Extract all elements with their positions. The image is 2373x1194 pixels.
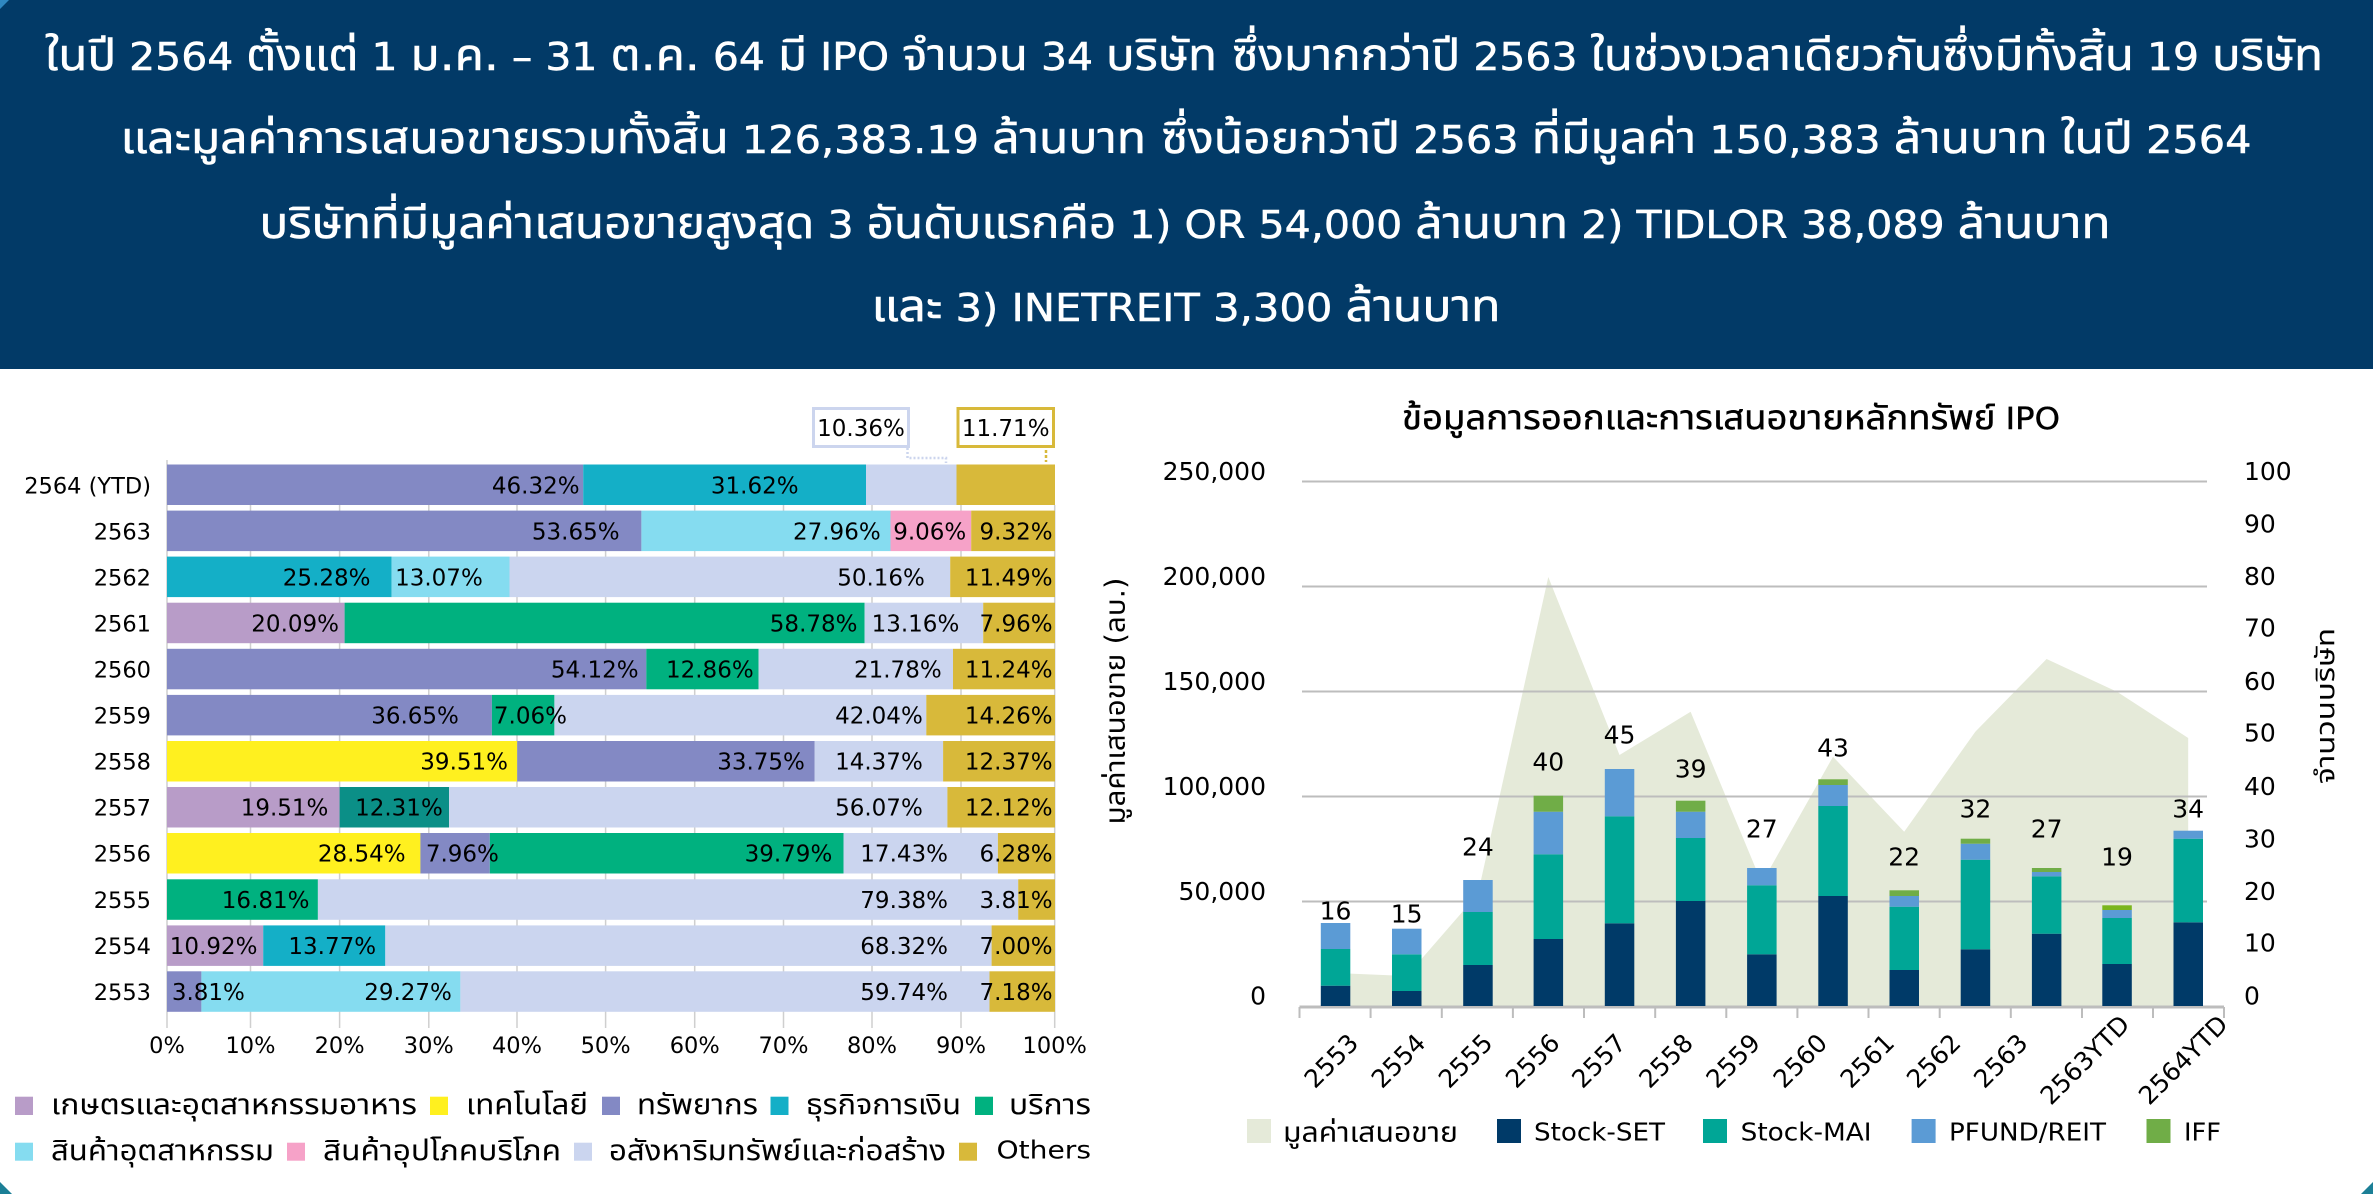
- left axis title: มูลค่าเสนอขาย (ลบ.): [1098, 577, 1132, 825]
- legend: series: มูลค่าเสนอขาย: [1283, 1116, 1458, 1150]
- bar: 2555: 3.81%: [980, 888, 1053, 914]
- bar: 2554: 13.77%: [288, 934, 376, 960]
- category labels: 2556: [1500, 1028, 1565, 1094]
- company count labels: 45: [1604, 720, 1635, 750]
- x axis labels: 90%: [936, 1033, 986, 1059]
- x axis labels: 100%: [1023, 1033, 1087, 1059]
- company count labels: [1320, 720, 2204, 928]
- bar: 2553: 3.81%: [172, 980, 245, 1006]
- bar: 2557: 12.12%: [965, 796, 1053, 822]
- bar: 2562: [1961, 839, 1990, 1006]
- bar: 2556: 17.43%: [860, 842, 948, 868]
- right count axis: 50: [2244, 718, 2276, 748]
- grid ticks: [167, 460, 1055, 1028]
- company count labels: 19: [2101, 842, 2133, 872]
- bar: 2561: [1890, 890, 1919, 1006]
- left value axis: 200,000: [1163, 562, 1266, 591]
- bar: 2554: [94, 925, 1055, 966]
- bar: 2561: 7.96%: [980, 612, 1053, 638]
- bar: 2559: [94, 695, 1055, 735]
- panel: sector share stacked bar chart: [15, 408, 1091, 1167]
- company count labels: 22: [1888, 842, 1920, 872]
- right count axis: 20: [2244, 877, 2276, 906]
- right count axis: 40: [2244, 772, 2276, 801]
- bar: 2563: 27.96%: [793, 520, 881, 546]
- bar: 2557: 56.07%: [835, 796, 923, 822]
- bar: 2553: 2553: [94, 980, 151, 1006]
- right count axis: 0: [2244, 982, 2260, 1010]
- panel: IPO combo chart: [1098, 398, 2341, 1150]
- bar: 2562: 13.07%: [395, 566, 483, 592]
- bar: 2558: 33.75%: [717, 750, 805, 776]
- x axis labels: 60%: [670, 1033, 720, 1059]
- header text: ในปี 2564 ตั้งแต่ 1 ม.ค. – 31 ต.ค. 64 มี IPO จำนวน 34 บริษัท ซึ่งมากกว่าปี 2563 ในช่วงเวลาเดียวกันซึ่งมีทั้งสิ้น 19 บริษัท: [45, 25, 2323, 81]
- bar: 2564 (YTD): 46.32%: [492, 474, 580, 500]
- legend: sectors: สินค้าอุปโภคบริโภค: [323, 1133, 561, 1167]
- company count labels: 34: [2172, 794, 2204, 824]
- bar: 2561: 58.78%: [770, 612, 858, 638]
- corner accents: [0, 1182, 2373, 1194]
- bar: 2563: [2032, 868, 2061, 1006]
- bar: 2560: [94, 649, 1055, 689]
- right axis title: จำนวนบริษัท: [2311, 628, 2341, 784]
- company count labels: 40: [1532, 748, 1564, 776]
- bar: 2556: 39.79%: [745, 842, 832, 868]
- bar: 2563: 9.32%: [980, 520, 1053, 546]
- left value axis: 0: [1250, 982, 1266, 1010]
- legend: series: PFUND/REIT: [1949, 1118, 2107, 1146]
- callout: 11.71%: [958, 408, 1054, 462]
- bar: 2558: [1676, 801, 1705, 1006]
- bar: 2555: [94, 879, 1055, 920]
- bar: 2560: 11.24%: [965, 658, 1053, 684]
- right count axis: 100: [2244, 457, 2292, 486]
- bar: 2560: 2560: [94, 658, 151, 684]
- bar: 2554: 10.92%: [170, 934, 258, 960]
- left value axis: 250,000: [1163, 457, 1266, 486]
- legend: sectors: เทคโนโลยี: [466, 1087, 588, 1121]
- company count labels: 32: [1959, 794, 1991, 824]
- header text: และมูลค่าการเสนอขายรวมทั้งสิ้น 126,383.19 ล้านบาท ซึ่งน้อยกว่าปี 2563 ที่มีมูลค่า 150,383 ล้านบาท ในปี 2564: [120, 108, 2252, 165]
- category labels: 2563: [1968, 1028, 2034, 1094]
- bar: 2561: 2561: [94, 612, 151, 638]
- bar: 2562: [94, 557, 1055, 597]
- bar: 2562: 2562: [94, 566, 151, 592]
- category labels: 2555: [1433, 1028, 1498, 1094]
- category labels: 2564YTD: [2133, 1010, 2234, 1110]
- bar: 2563: 2563: [94, 520, 151, 546]
- category labels: 2558: [1633, 1028, 1699, 1094]
- left value axis: 150,000: [1163, 667, 1266, 696]
- bar: 2554: 7.00%: [980, 934, 1053, 960]
- legend: series: Stock-SET: [1534, 1118, 1666, 1146]
- bar: 2564 (YTD): 2564 (YTD): [24, 474, 151, 500]
- bar: 2563: 53.65%: [532, 520, 620, 546]
- bar: 2559: 36.65%: [371, 704, 459, 730]
- bar: 2558: 12.37%: [965, 750, 1053, 776]
- company count labels: 39: [1675, 754, 1707, 784]
- x axis labels: [149, 1033, 1087, 1059]
- chart title: ข้อมูลการออกและการเสนอขายหลักทรัพย์ IPO: [1402, 398, 2060, 438]
- bar: 2559: [1747, 868, 1777, 1006]
- legend: series: [1247, 1116, 2221, 1150]
- legend: sectors: บริการ: [1009, 1087, 1091, 1121]
- bar: 2556: [1534, 796, 1563, 1006]
- bar: 2556: 28.54%: [318, 842, 406, 868]
- category labels: 2554: [1366, 1028, 1431, 1094]
- bar: 2553: 59.74%: [860, 980, 948, 1006]
- bar: 2555: [1463, 880, 1493, 1006]
- bar: 2559: 14.26%: [965, 704, 1053, 730]
- bar: 2558: 2558: [94, 750, 151, 776]
- bar: 2556: [94, 833, 1055, 874]
- bar: 2554: 2554: [94, 934, 151, 960]
- category labels: 2557: [1566, 1028, 1632, 1094]
- legend: series: IFF: [2184, 1118, 2221, 1146]
- left value axis: [1163, 457, 1266, 1010]
- category labels: [1299, 1010, 2234, 1110]
- legend: series: Stock-MAI: [1741, 1118, 1872, 1146]
- bar: 2553: [1321, 923, 1350, 1006]
- bar: 2557: 19.51%: [241, 796, 328, 822]
- bar: 2559: 7.06%: [494, 704, 567, 730]
- bar: 2564 (YTD): [24, 464, 1055, 505]
- bar: 2556: 2556: [94, 842, 151, 868]
- bar: 2557: [94, 787, 1055, 828]
- right count axis: 60: [2244, 667, 2276, 696]
- left value axis: 50,000: [1179, 877, 1266, 906]
- legend: sectors: ทรัพยากร: [637, 1087, 758, 1121]
- gridlines and x axis: [1300, 482, 2224, 1018]
- bar: 2563: [94, 511, 1055, 551]
- x axis labels: 30%: [404, 1033, 454, 1059]
- x axis labels: 70%: [758, 1033, 809, 1059]
- x axis labels: 0%: [149, 1033, 185, 1059]
- legend: sectors: เกษตรและอุตสาหกรรมอาหาร: [51, 1087, 417, 1121]
- company count labels: 24: [1462, 832, 1494, 862]
- category labels: 2560: [1768, 1028, 1833, 1094]
- header banner: [0, 0, 2373, 369]
- bar: 2563: 9.06%: [893, 520, 966, 546]
- company count labels: 16: [1320, 896, 1351, 926]
- bar: 2560: 21.78%: [854, 658, 942, 684]
- legend: sectors: [15, 1087, 1091, 1167]
- bar: 2562: 50.16%: [837, 566, 925, 592]
- company count labels: 27: [1746, 814, 1778, 844]
- bar: 2559: 42.04%: [835, 704, 923, 730]
- bar: 2564 (YTD): 31.62%: [711, 474, 799, 500]
- bar: 2561: 13.16%: [872, 612, 959, 638]
- bar: 2556: 7.96%: [426, 842, 499, 868]
- company count labels: 15: [1391, 900, 1423, 928]
- category labels: 2561: [1835, 1028, 1900, 1094]
- category labels: 2563YTD: [2035, 1010, 2135, 1110]
- legend: sectors: สินค้าอุตสาหกรรม: [51, 1133, 274, 1167]
- left value axis: 100,000: [1163, 772, 1266, 801]
- x axis labels: 10%: [225, 1033, 276, 1059]
- bar: 2558: 39.51%: [420, 750, 508, 776]
- bar: 2560: 12.86%: [666, 658, 754, 684]
- bar: 2554: [1392, 929, 1422, 1006]
- right count axis: 80: [2244, 562, 2276, 591]
- callout: 10.36%: [814, 408, 946, 463]
- right count axis: 90: [2244, 510, 2276, 538]
- bar: 2553: 7.18%: [980, 980, 1053, 1006]
- company count labels: 43: [1817, 734, 1849, 762]
- bar: 2553: 29.27%: [364, 980, 452, 1006]
- bar: 2561: 20.09%: [251, 612, 339, 638]
- bar: 2563YTD: [2102, 905, 2132, 1006]
- area: offering value: [1336, 577, 2188, 1006]
- header text: บริษัทที่มีมูลค่าเสนอขายสูงสุด 3 อันดับแรกคือ 1) OR 54,000 ล้านบาท 2) TIDLOR 38,089 ล้านบาท: [260, 193, 2110, 250]
- bar: 2558: [94, 741, 1055, 782]
- bar: 2560: [1818, 779, 1848, 1006]
- legend: sectors: อสังหาริมทรัพย์และก่อสร้าง: [609, 1133, 946, 1167]
- bar: 2560: 54.12%: [551, 658, 639, 684]
- bar: 2564YTD: [2174, 831, 2203, 1006]
- legend: sectors: Others: [996, 1136, 1091, 1164]
- bar: 2562: 11.49%: [965, 566, 1053, 592]
- x axis labels: 20%: [315, 1033, 365, 1059]
- bar: 2555: 16.81%: [222, 888, 310, 914]
- callout: 11.71%: 11.71%: [962, 416, 1050, 442]
- bar: 2556: 6.28%: [980, 842, 1053, 868]
- header text: และ 3) INETREIT 3,300 ล้านบาท: [872, 281, 1500, 332]
- x axis labels: 80%: [847, 1033, 897, 1059]
- x axis labels: 40%: [492, 1033, 542, 1059]
- legend: sectors: ธุรกิจการเงิน: [806, 1087, 961, 1121]
- x axis labels: 50%: [581, 1033, 631, 1059]
- company count labels: 27: [2031, 814, 2063, 844]
- category labels: 2562: [1901, 1028, 1966, 1094]
- bar: 2561: [94, 603, 1055, 643]
- bar: 2557: [1605, 769, 1634, 1006]
- bar: 2562: 25.28%: [283, 566, 370, 592]
- bar: 2555: 2555: [94, 888, 151, 914]
- bar: 2557: 12.31%: [355, 796, 443, 822]
- category labels: 2553: [1299, 1028, 1364, 1094]
- bar: 2557: 2557: [94, 796, 151, 822]
- right count axis: 30: [2244, 824, 2276, 854]
- bar: 2558: 14.37%: [835, 750, 923, 776]
- bar: 2555: 79.38%: [860, 888, 948, 914]
- callout: 10.36%: 10.36%: [817, 416, 905, 442]
- right count axis: [2244, 457, 2292, 1010]
- right count axis: 10: [2244, 928, 2276, 958]
- category labels: 2559: [1700, 1028, 1766, 1094]
- right count axis: 70: [2244, 614, 2276, 642]
- bar: 2553: [94, 971, 1055, 1012]
- header text: [45, 25, 2323, 332]
- bar: 2559: 2559: [94, 704, 151, 730]
- bar: 2554: 68.32%: [860, 934, 948, 960]
